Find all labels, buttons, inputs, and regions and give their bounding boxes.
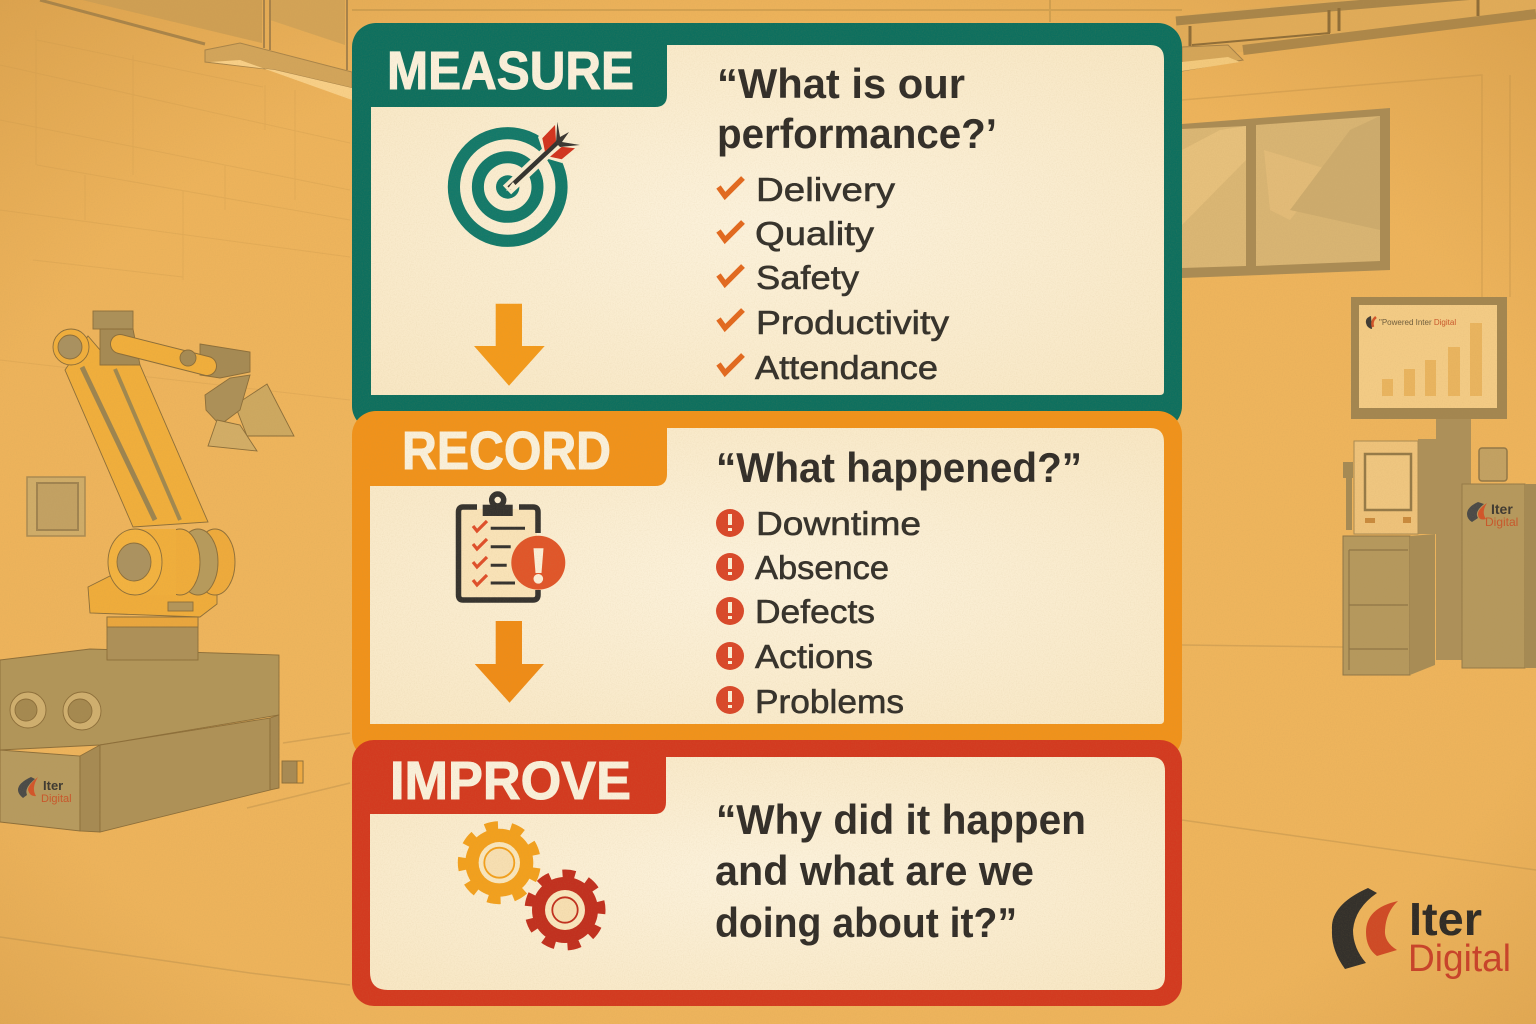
gear: red [518, 863, 612, 957]
right cabinet with logo [1462, 448, 1536, 668]
wall panel right [1182, 75, 1510, 297]
item: actions [716, 639, 873, 676]
improve question: doing about it?” [715, 899, 1017, 946]
item: absence: Absence [755, 550, 889, 587]
item: safety: Safety [756, 260, 859, 297]
panel: measure [352, 23, 1182, 430]
record heading: RECORD [402, 421, 611, 481]
kiosk terminal [1343, 439, 1436, 675]
display monitor with chart: "Powered Inter Digital [1379, 318, 1456, 327]
measure question: performance?’ [717, 110, 997, 157]
logo: Iter Digital: Digital [1408, 938, 1511, 980]
improve question: and what are we [715, 847, 1034, 894]
measure question: “What is our [717, 60, 965, 107]
item: defects: Defects [755, 594, 875, 631]
base logo: Digital [41, 793, 72, 805]
arrow: measure to record [474, 304, 545, 386]
logo: Iter Digital: Iter [1409, 893, 1482, 945]
logo: Iter Digital [1332, 888, 1511, 980]
item: delivery: Delivery [756, 172, 895, 209]
improve question [715, 796, 1086, 946]
right cabinet with logo: Digital [1485, 515, 1518, 529]
icon: target with arrow [454, 118, 585, 241]
item: actions: Actions [755, 639, 873, 676]
icon: clipboard with alert [458, 494, 565, 600]
robot arm [0, 311, 303, 832]
shoulder joint [195, 529, 235, 595]
panel: record [352, 411, 1182, 760]
item: delivery [718, 172, 895, 209]
improve heading: IMPROVE [390, 751, 631, 811]
display monitor with chart [1351, 297, 1507, 660]
floor lines [0, 645, 1536, 985]
arrow: record to improve [475, 621, 544, 703]
right cabinet with logo: Iter [1491, 501, 1513, 517]
measure checklist [718, 172, 949, 387]
ceiling beams right [1176, 0, 1536, 71]
icon: gears [459, 822, 612, 957]
item: attendance: Attendance [755, 350, 938, 387]
wall box [27, 477, 85, 536]
base logo: Iter [43, 778, 63, 793]
links [65, 336, 208, 527]
flange [88, 576, 217, 617]
base logo [18, 777, 72, 805]
item: safety [718, 260, 859, 297]
gripper [235, 384, 294, 436]
measure heading: MEASURE [387, 41, 634, 101]
forearm [200, 344, 250, 378]
left wall bricks [0, 30, 350, 400]
item: downtime: Downtime [756, 506, 921, 543]
record question: “What happened?” [716, 444, 1082, 491]
item: productivity: Productivity [756, 305, 949, 342]
record alert list [716, 506, 921, 721]
item: quality [718, 216, 874, 253]
window [1182, 108, 1390, 278]
item: quality: Quality [755, 216, 874, 253]
item: problems: Problems [755, 684, 904, 721]
measure question [717, 60, 997, 157]
machine base [0, 649, 303, 832]
improve question: “Why did it happen [716, 796, 1086, 843]
gear: orange [459, 822, 540, 903]
ceiling beam left [40, 0, 352, 100]
panel: improve [352, 740, 1182, 1006]
top centre ceiling [352, 0, 1182, 22]
column [107, 617, 198, 660]
